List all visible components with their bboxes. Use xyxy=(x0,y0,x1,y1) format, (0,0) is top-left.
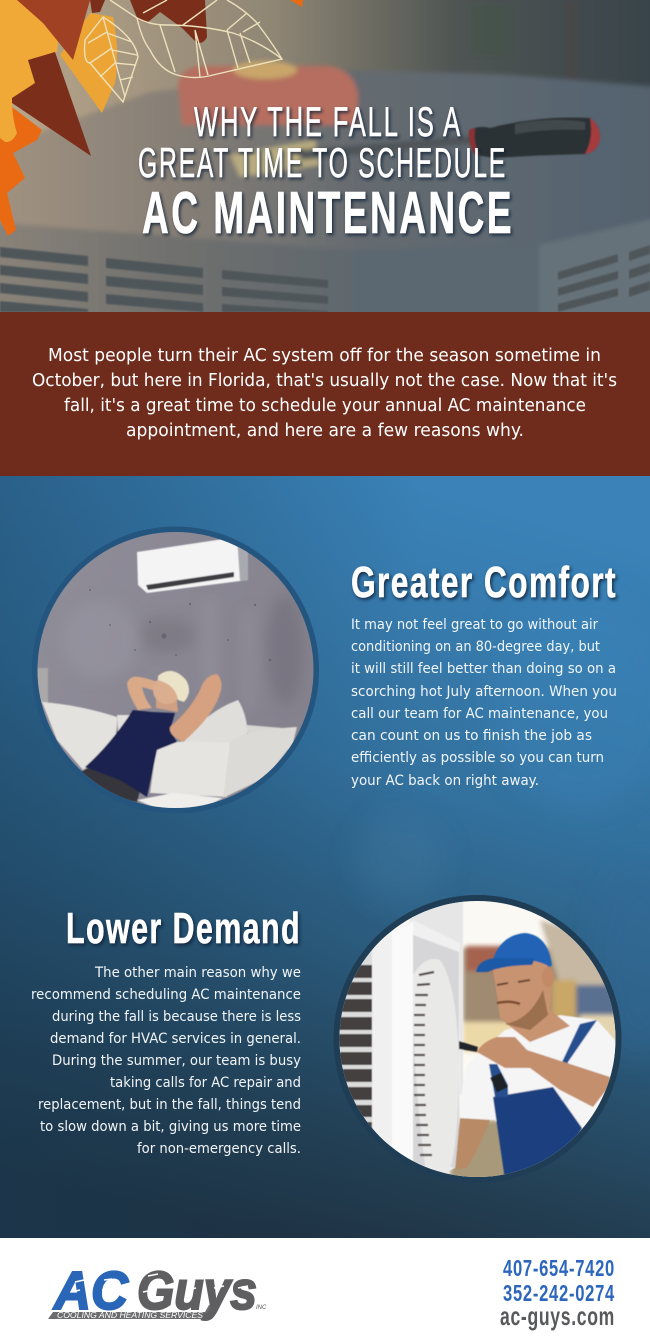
panel: footer xyxy=(0,1238,650,1344)
text block: Greater Comfort: call our team for AC maintenance, you xyxy=(351,706,608,722)
text block: Greater Comfort: conditioning on an 80-degree day, but xyxy=(351,639,600,655)
text block: Greater Comfort: can count on us to finish the job as xyxy=(351,728,592,744)
logo: AC Guys: Guys xyxy=(137,1261,257,1321)
panel: blue reasons background xyxy=(0,476,650,1238)
intro text: October, but here in Florida, that's usually not the case. Now that it's xyxy=(32,371,617,391)
text block: Lower Demand: during the fall is because there is less xyxy=(52,1009,301,1025)
text block: Greater Comfort: it will still feel better than doing so on a xyxy=(351,661,616,677)
logo: AC Guys: INC xyxy=(256,1305,267,1311)
photo: woman relaxing under wall AC xyxy=(30,525,320,815)
text block: Greater Comfort: efficiently as possible so you can turn xyxy=(351,750,604,766)
text block: Lower Demand: for non-emergency calls. xyxy=(137,1141,301,1157)
icon: screwdriver xyxy=(469,117,600,158)
text block: Greater Comfort: scorching hot July afternoon. When you xyxy=(351,684,617,700)
header photo: AC unit with tools xyxy=(0,0,650,320)
text block: Lower Demand: recommend scheduling AC maintenance xyxy=(31,987,301,1003)
woman figure xyxy=(85,671,222,797)
contact details xyxy=(500,1255,615,1331)
text block: Greater Comfort xyxy=(351,617,617,789)
text block: Lower Demand: taking calls for AC repair and xyxy=(110,1075,301,1091)
text block: Lower Demand xyxy=(31,965,301,1157)
intro text: appointment, and here are a few reasons why. xyxy=(126,421,524,441)
intro text xyxy=(32,346,617,441)
text block: Lower Demand: to slow down a bit, giving us more time xyxy=(40,1119,301,1135)
autumn leaves decoration xyxy=(0,0,303,236)
panel: intro xyxy=(0,312,650,476)
fan grille xyxy=(413,959,459,1175)
text block: Lower Demand: The other main reason why we xyxy=(94,965,301,981)
logo: AC Guys xyxy=(48,1261,267,1321)
text block: Greater Comfort: your AC back on right away. xyxy=(351,773,539,789)
title: WHY THE FALL IS A xyxy=(194,98,462,145)
vent slats xyxy=(339,965,372,1134)
logo: AC Guys: AC xyxy=(52,1261,129,1321)
text block: Greater Comfort: It may not feel great to go without air xyxy=(351,617,598,633)
heading: Lower Demand: Lower Demand xyxy=(66,904,301,953)
intro text: fall, it's a great time to schedule your annual AC maintenance xyxy=(64,396,586,416)
text block: Lower Demand: During the summer, our team is busy xyxy=(52,1053,301,1069)
photo: technician servicing outdoor AC unit xyxy=(333,895,623,1190)
logo: AC Guys: COOLING AND HEATING SERVICES xyxy=(57,1310,203,1320)
text block: Lower Demand: demand for HVAC services in general. xyxy=(50,1031,301,1047)
title xyxy=(138,98,514,246)
technician figure xyxy=(459,933,615,1180)
text block: Lower Demand: replacement, but in the fall, things tend xyxy=(38,1097,301,1113)
icon: wall air conditioner xyxy=(137,537,248,593)
intro text: Most people turn their AC system off for the season sometime in xyxy=(48,346,601,366)
